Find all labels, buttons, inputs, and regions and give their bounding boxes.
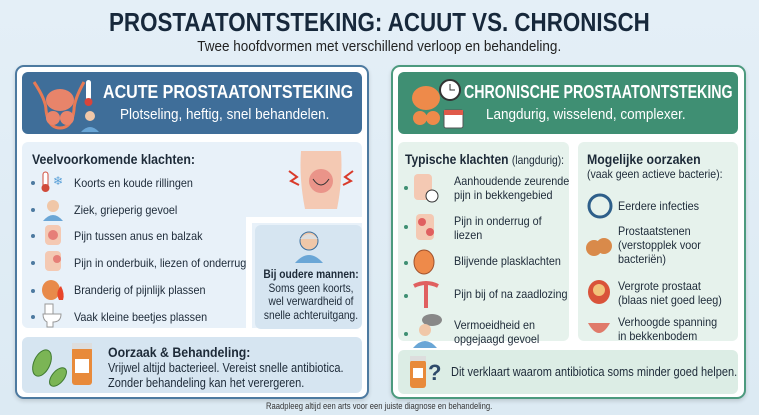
possible causes box: Verhoogde spanning — [618, 315, 717, 329]
subtitle: Twee hoofdvormen met verschillend verloop en behandeling. — [198, 38, 561, 55]
typical complaints box: Blijvende plasklachten — [454, 254, 561, 268]
chronic header: Langdurig, wisselend, complexer. — [486, 106, 686, 123]
symptoms list: Vaak kleine beetjes plassen — [74, 310, 207, 324]
possible causes box: Prostaatstenen — [618, 224, 691, 238]
possible causes box: Vergrote prostaat — [618, 279, 701, 293]
typical complaints box: Vermoeidheid en — [454, 318, 535, 332]
panel: cause and treatment — [22, 337, 362, 393]
possible causes box: bacteriën) — [618, 252, 666, 266]
typical complaints box — [398, 142, 569, 341]
symptoms list: Pijn tussen anus en balzak — [74, 229, 202, 243]
chronic header: CHRONISCHE PROSTAATONTSTEKING — [464, 82, 733, 102]
callout: older men: Bij oudere mannen: — [263, 267, 359, 281]
panel: cause and treatment: Zonder behandeling kan het verergeren. — [108, 376, 304, 390]
symptoms list: Koorts en koude rillingen — [74, 176, 193, 190]
typical complaints box: opgejaagd gevoel — [454, 332, 539, 346]
callout: older men: wel verwardheid of — [268, 294, 354, 308]
panel: cause and treatment: Vrijwel altijd bacterieel. Vereist snelle antibiotica. — [108, 361, 344, 375]
panel: cause and treatment: Oorzaak & Behandeling: — [108, 344, 250, 360]
icon: medicine with question — [410, 356, 441, 388]
bottom note — [398, 350, 738, 394]
symptoms list: Ziek, grieperig gevoel — [74, 203, 177, 217]
symptoms list: Branderig of pijnlijk plassen — [74, 283, 205, 297]
symptoms list — [31, 151, 246, 328]
typical complaints box: pijn in bekkengebied — [454, 188, 552, 202]
typical complaints box: Typische klachten (langdurig): — [405, 151, 564, 167]
possible causes box — [578, 142, 738, 341]
possible causes box: Eerdere infecties — [618, 199, 699, 213]
icon: bacteria and medicine — [32, 343, 92, 387]
typical complaints box: Aanhoudende zeurende — [454, 174, 569, 188]
icon: medicine with question: ? — [428, 360, 441, 385]
bottom note: Dit verklaart waarom antibiotica soms minder goed helpen. — [451, 365, 737, 379]
callout: older men: Soms geen koorts, — [268, 280, 354, 294]
panel: chronic — [391, 65, 746, 399]
symptoms list: ❄ — [53, 174, 63, 188]
icon: prostate with thermometer — [32, 80, 99, 132]
possible causes box: (blaas niet goed leeg) — [618, 293, 722, 307]
typical complaints box: Pijn in onderrug of — [454, 214, 542, 228]
symptoms list: Pijn in onderbuik, liezen of onderrug — [74, 256, 246, 270]
acute header — [22, 72, 362, 134]
possible causes box: Mogelijke oorzaken — [587, 151, 701, 167]
possible causes box: (verstopplek voor — [618, 238, 701, 252]
footer: Raadpleeg altijd een arts voor een juiste diagnose en behandeling. — [266, 401, 493, 411]
icon: prostate clock calendar — [412, 79, 464, 128]
panel: acute — [15, 65, 369, 399]
possible causes box: in bekkenbodem — [618, 329, 697, 343]
typical complaints box: liezen — [454, 228, 482, 242]
acute header: Plotseling, heftig, snel behandelen. — [120, 106, 329, 123]
acute header text: ACUTE PROSTAATONTSTEKING — [103, 82, 353, 102]
typical complaints box: Pijn bij of na zaadlozing — [454, 287, 567, 301]
callout: older men — [255, 225, 362, 329]
icon: pelvis pain — [288, 151, 354, 209]
symptoms list: Veelvoorkomende klachten: — [32, 151, 195, 167]
chronic header — [398, 72, 738, 134]
title: PROSTAATONTSTEKING: ACUUT VS. CHRONISCH — [109, 7, 650, 37]
symptoms box — [22, 142, 362, 328]
callout: older men: snelle achteruitgang. — [264, 308, 358, 322]
possible causes box: (vaak geen actieve bacterie): — [587, 167, 723, 181]
